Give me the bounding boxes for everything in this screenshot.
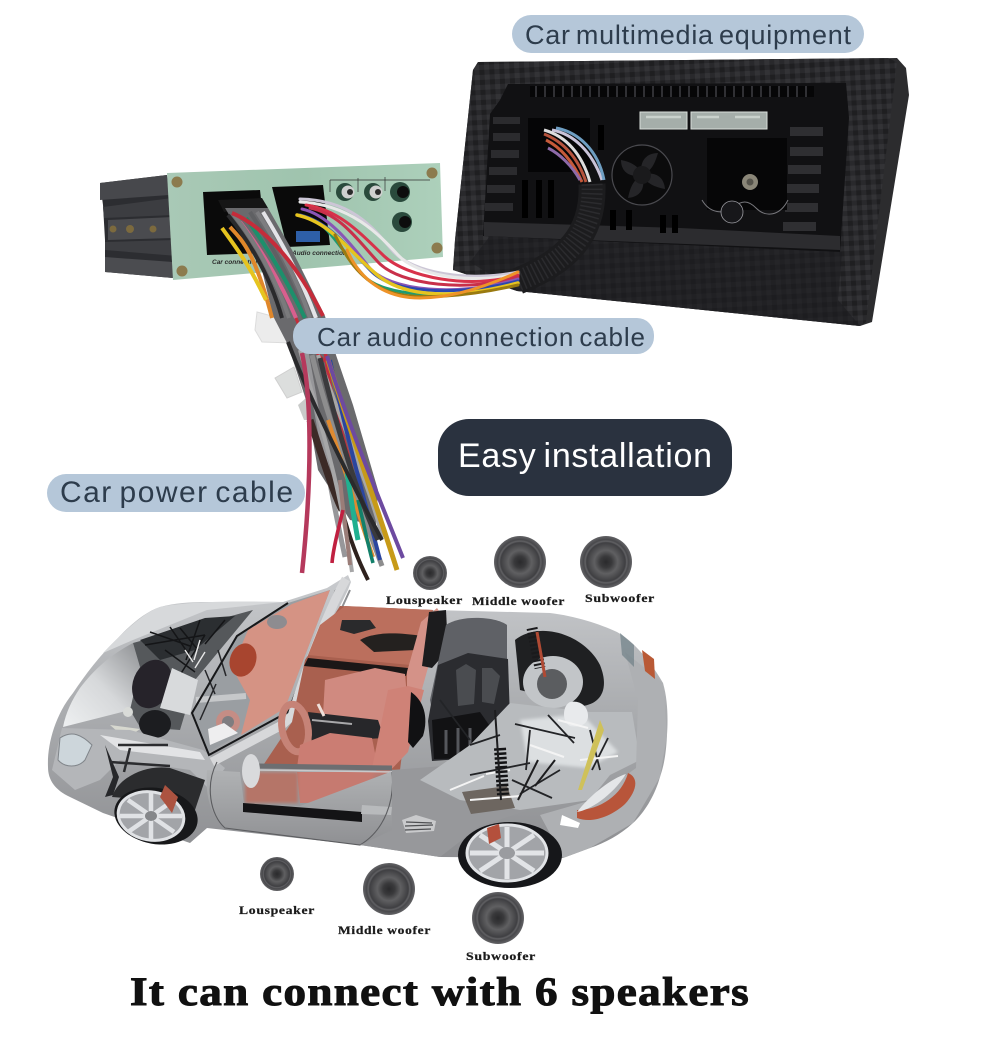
- rca jacks: [336, 182, 412, 232]
- audio amplifier box: Audio connection: [291, 250, 347, 257]
- door lower pink glow: [245, 772, 298, 803]
- engine white block: [160, 668, 198, 715]
- upper hood band: [103, 602, 283, 653]
- speaker: top loudspeaker: [386, 556, 463, 607]
- label: car audio connection cable: Car audio connection cable: [317, 322, 645, 352]
- rear wheel: [458, 822, 562, 888]
- windshield glass: [193, 590, 330, 753]
- engine: [428, 653, 510, 761]
- speaker: bottom subwoofer: [466, 892, 536, 963]
- rear mid body: [360, 760, 560, 857]
- badge: easy installation: Easy installation: [458, 437, 712, 475]
- windshield inner black edge: [192, 590, 336, 755]
- vent slots: [530, 86, 814, 97]
- rca group frame: [330, 177, 430, 192]
- speaker: top middle woofer: Middle woofer: [472, 594, 565, 608]
- rear body sweep: [540, 652, 667, 858]
- hood panel: [63, 643, 140, 727]
- door panel: [308, 606, 433, 665]
- brake booster: [139, 710, 171, 738]
- white cable tags: [255, 312, 311, 420]
- front spare tire: [125, 654, 179, 714]
- side vent: [402, 815, 436, 833]
- lower dark band: [470, 236, 860, 326]
- bundle backing: [225, 208, 378, 525]
- console: [308, 712, 384, 742]
- badge: easy installation: [438, 419, 732, 496]
- gear knob: [318, 704, 324, 716]
- front strut: [500, 748, 503, 795]
- door pocket black strip: [243, 803, 362, 822]
- front wheel arch: [112, 767, 205, 825]
- wire window: [528, 118, 590, 172]
- speaker: bottom loudspeaker: Louspeaker: [239, 903, 315, 917]
- upper bundle: [263, 212, 316, 318]
- lower front light band: [52, 728, 225, 790]
- door outline: [210, 762, 393, 845]
- braided cable sleeve: [518, 184, 592, 281]
- plate labels: Car connection: [212, 259, 259, 266]
- door rail: [258, 766, 392, 768]
- speaker: top subwoofer: Subwoofer: [585, 593, 655, 605]
- right fins: [783, 127, 823, 231]
- speaker: top subwoofer: [580, 536, 655, 605]
- front wheel: [110, 781, 202, 851]
- speaker: bottom middle woofer: [338, 863, 431, 937]
- lower housing strip: [484, 222, 840, 250]
- left fins: [485, 117, 520, 211]
- door panel: [207, 770, 400, 845]
- vertical slots: [522, 125, 678, 233]
- speaker: bottom loudspeaker: [239, 857, 315, 917]
- title: It can connect with 6 speakers: [130, 969, 750, 1014]
- screws: [172, 176, 182, 188]
- cooling fan: [612, 145, 672, 205]
- front engine bay: [130, 610, 253, 730]
- steering wheel: [278, 702, 312, 754]
- rear dark glass: [430, 618, 507, 750]
- mirror: [242, 754, 260, 788]
- label: car multimedia equipment: Car multimedia equipment: [525, 20, 851, 50]
- recess and screw: [707, 138, 787, 210]
- head unit: car multimedia equipment rear panel: [453, 58, 909, 326]
- speaker: top middle woofer: [472, 536, 565, 608]
- rear strut: [532, 628, 540, 668]
- lower bundle: [325, 350, 352, 470]
- lower seat: [297, 733, 378, 768]
- upper seat: [323, 668, 409, 733]
- heatsink: [100, 175, 178, 278]
- car power wires: [222, 208, 403, 580]
- speaker: top loudspeaker: Louspeaker: [386, 593, 463, 607]
- speaker: bottom subwoofer: Subwoofer: [466, 949, 536, 963]
- audio amplifier box: [100, 163, 443, 280]
- speaker: bottom middle woofer: Middle woofer: [338, 923, 431, 937]
- rear light: [577, 773, 635, 820]
- inner black housing: [483, 83, 849, 252]
- windshield frame: [212, 579, 346, 762]
- car audio connection wires: [297, 199, 518, 298]
- connectors: [203, 190, 267, 255]
- car body: [48, 575, 668, 858]
- wires into head unit: [544, 128, 604, 182]
- white connectors: [640, 112, 687, 129]
- rear tyre: [515, 631, 604, 706]
- green aluminium plate: [167, 163, 443, 280]
- cutaway car illustration: [48, 575, 668, 888]
- label: car power cable: Car power cable: [60, 476, 293, 509]
- interior base: [262, 606, 433, 770]
- gearbox and rear mechanicals: [420, 703, 640, 810]
- headlight: [58, 734, 92, 766]
